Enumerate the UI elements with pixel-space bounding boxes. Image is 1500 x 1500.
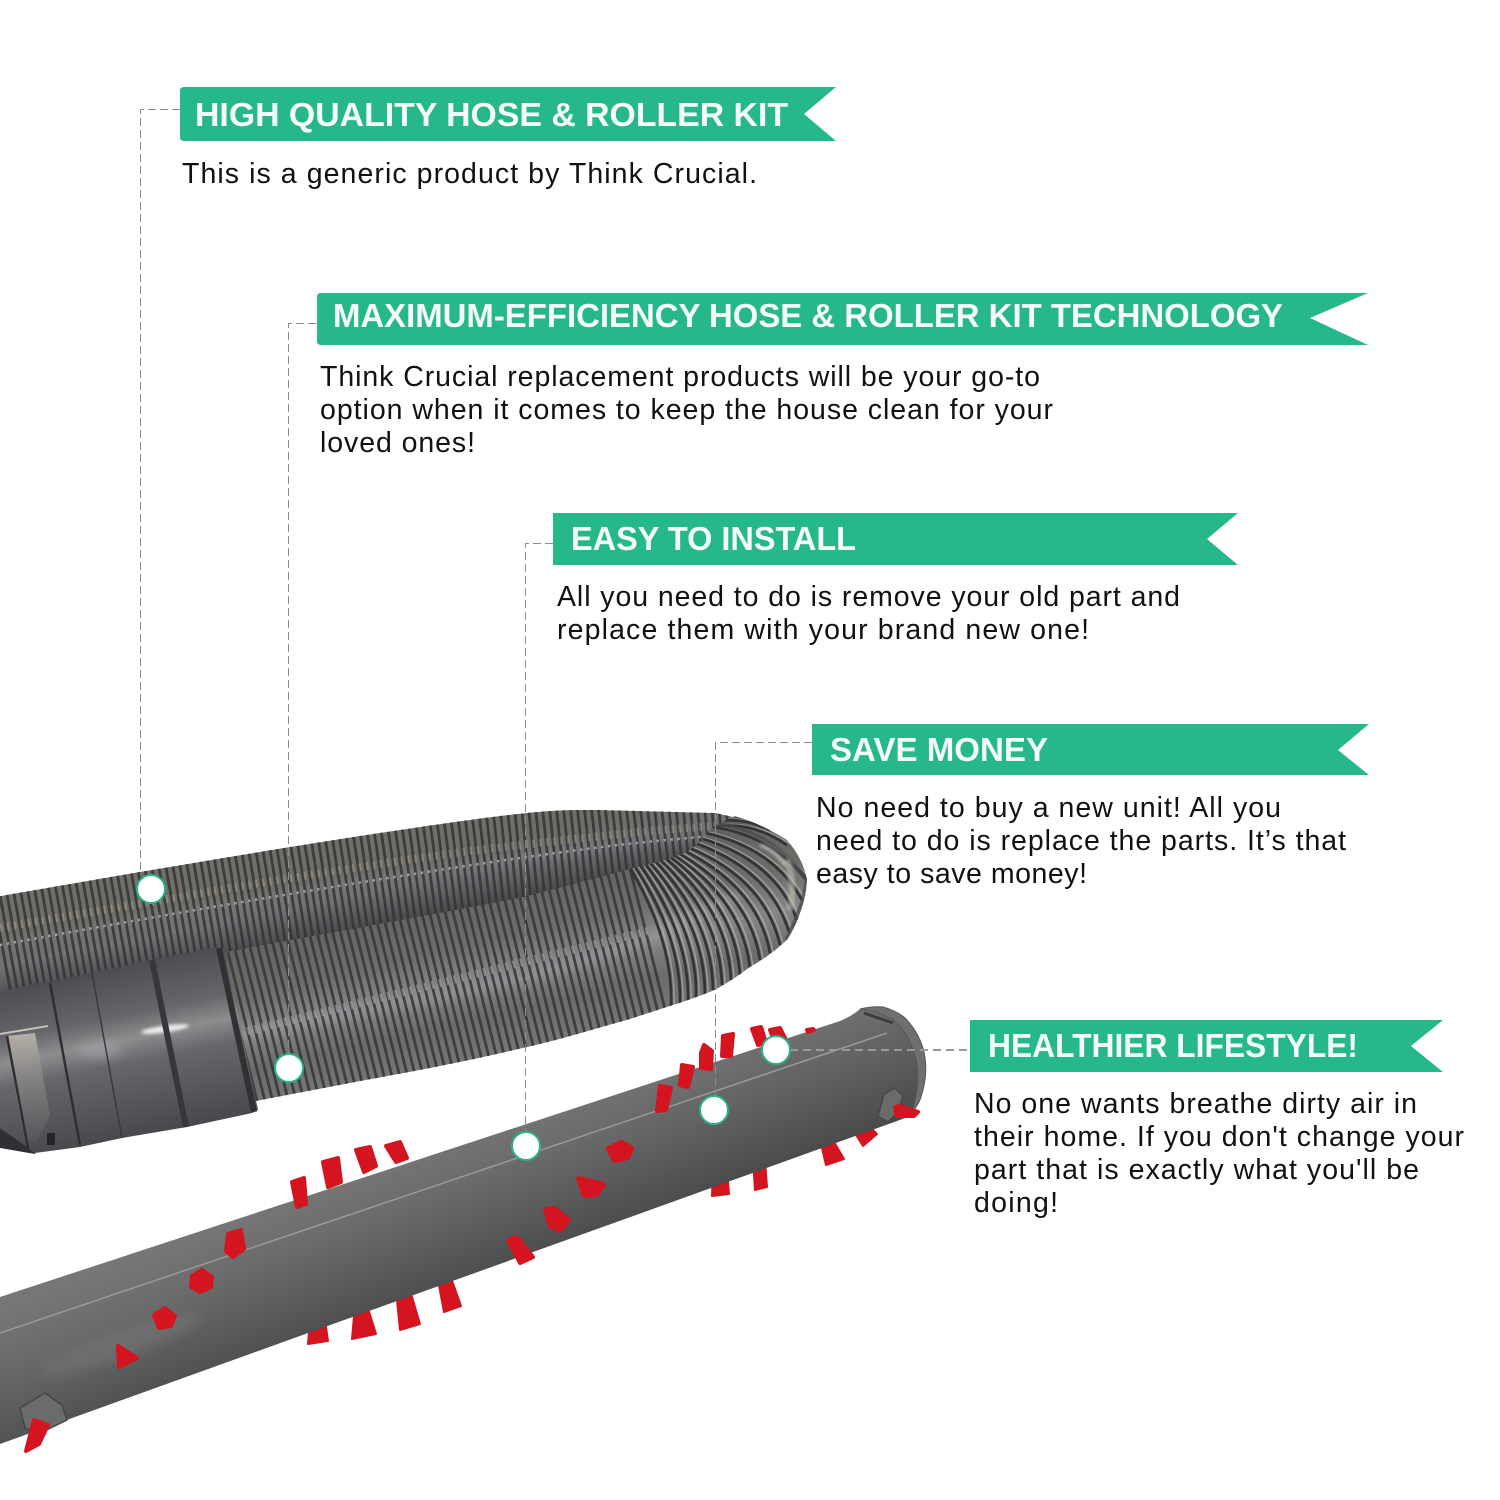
body text <box>974 1088 1464 1219</box>
callout 1 leader line <box>140 110 180 875</box>
callout 3 leader line <box>526 544 553 1132</box>
panel: high quality <box>180 87 836 190</box>
photo: vacuum hose <box>0 810 810 1154</box>
roller: end tabs <box>20 1088 903 1434</box>
body text: Think Crucial replacement products will be your go-to <box>320 361 1040 393</box>
banner ribbon <box>180 87 836 141</box>
roller: end cap <box>860 1007 926 1112</box>
marker dot 5 <box>762 1036 790 1064</box>
banner ribbon <box>970 1020 1443 1072</box>
marker dot 3 <box>512 1132 540 1160</box>
body text: No one wants breathe dirty air in <box>974 1088 1417 1120</box>
heading: MAXIMUM-EFFICIENCY HOSE & ROLLER KIT TECHNOLOGY <box>333 297 1283 334</box>
banner ribbon <box>553 513 1238 565</box>
body text: This is a generic product by Think Crucial. <box>182 158 757 190</box>
body text: easy to save money! <box>816 858 1087 890</box>
callout 2 leader line <box>288 324 316 1054</box>
callout 4 leader line <box>716 742 812 1096</box>
roller: body <box>0 1007 926 1444</box>
body text: doing! <box>974 1187 1058 1219</box>
photo: brush roller <box>0 1007 926 1451</box>
callout 5 leader line <box>790 1049 969 1051</box>
body text: replace them with your brand new one! <box>557 614 1089 646</box>
hose: near section and bend <box>225 816 810 1102</box>
body text: need to do is replace the parts. It’s that <box>816 825 1346 857</box>
heading: SAVE MONEY <box>830 731 1048 768</box>
body text: All you need to do is remove your old part and <box>557 581 1180 613</box>
roller: bristle tufts on face <box>26 1027 918 1451</box>
body text: loved ones! <box>320 427 475 459</box>
roller: bristles behind body <box>308 1116 877 1344</box>
body text: part that is exactly what you'll be <box>974 1154 1419 1186</box>
body text: their home. If you don't change your <box>974 1121 1464 1153</box>
marker dot 2 <box>275 1054 303 1082</box>
marker dot 4 <box>700 1096 728 1124</box>
panel: save money <box>812 724 1369 890</box>
heading: EASY TO INSTALL <box>571 520 856 557</box>
banner ribbon <box>317 293 1368 345</box>
heading: HEALTHIER LIFESTYLE! <box>988 1027 1358 1064</box>
body text <box>816 792 1346 890</box>
panel: easy to install <box>553 513 1238 646</box>
body text: option when it comes to keep the house clean for your <box>320 394 1054 426</box>
hose: connector cuff <box>0 947 258 1153</box>
body text: No need to buy a new unit! All you <box>816 792 1281 824</box>
hose: left dark fittings <box>0 1128 40 1154</box>
panel: healthier lifestyle <box>970 1020 1464 1219</box>
hose: far section <box>0 810 742 1000</box>
body text <box>320 361 1054 459</box>
marker dot 1 <box>137 875 165 903</box>
roller: mottled texture <box>35 1303 205 1387</box>
panel: maximum efficiency <box>317 293 1368 459</box>
banner ribbon <box>812 724 1369 775</box>
body text <box>557 581 1180 646</box>
heading: HIGH QUALITY HOSE & ROLLER KIT <box>195 96 788 133</box>
roller: seam line <box>0 1033 887 1333</box>
